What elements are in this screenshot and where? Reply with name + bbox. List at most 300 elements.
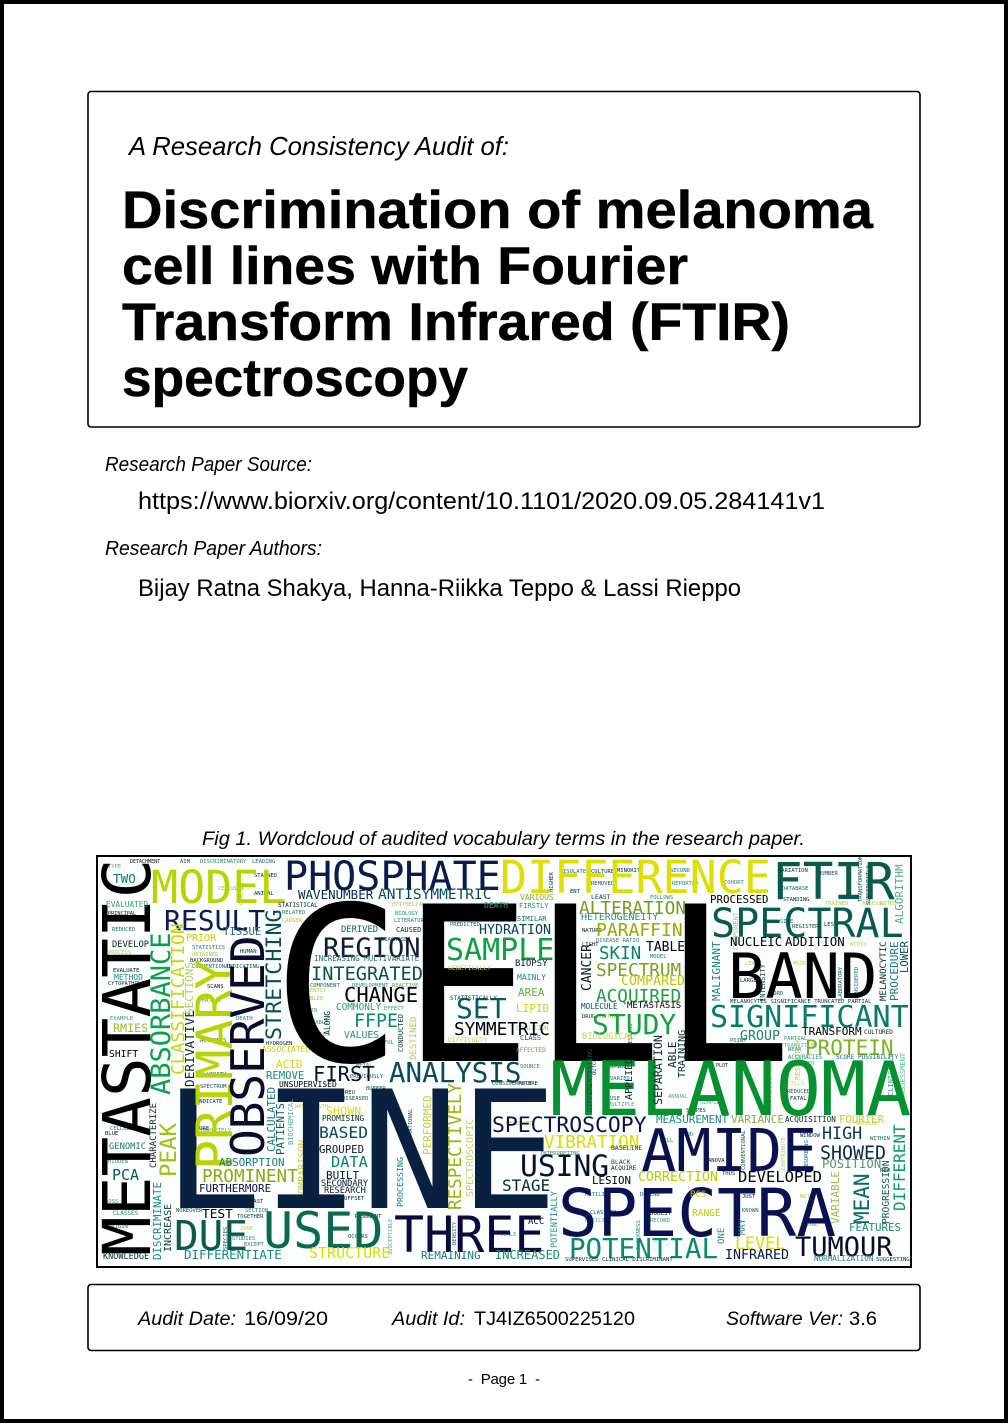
tiny filler words: NEAR bbox=[788, 1047, 802, 1053]
largest words: DUE bbox=[174, 1212, 248, 1260]
tiny filler words: DIAGNOSES bbox=[381, 937, 411, 943]
paper source: Research Paper Source: bbox=[105, 454, 312, 476]
tiny filler words: LABORATORY bbox=[838, 966, 844, 1000]
largest words: LINE bbox=[163, 1056, 558, 1247]
main title bbox=[122, 181, 874, 408]
tiny filler words: COMPONENT bbox=[732, 911, 740, 950]
small words: BIOPSY bbox=[515, 959, 548, 969]
small words: SHIFT bbox=[109, 1049, 138, 1060]
small words: AFFECTED bbox=[516, 1047, 546, 1054]
small words: VARIATION bbox=[778, 868, 808, 874]
tiny filler words: WIDTH bbox=[850, 942, 867, 948]
small words: AREA bbox=[518, 986, 545, 999]
tiny filler words: ENT bbox=[570, 889, 581, 895]
tiny filler words: FOLLOWS bbox=[650, 895, 673, 901]
small words: CHARACTERIZE bbox=[149, 1103, 159, 1168]
audit details panel bbox=[88, 1284, 920, 1350]
small words: STATISTICAL bbox=[278, 902, 318, 909]
small words: REMOVE bbox=[266, 1070, 304, 1082]
tiny filler words: DISEASED bbox=[342, 1096, 368, 1102]
small words: VARIABLE bbox=[829, 1171, 842, 1224]
tiny filler words: RELATED bbox=[282, 910, 305, 916]
main title: cell lines with Fourier bbox=[122, 237, 688, 296]
small words: SCORE POSSIBILITY bbox=[836, 1054, 899, 1061]
small words: RESEARCH bbox=[324, 1186, 366, 1196]
medium words: STUDY bbox=[592, 1008, 676, 1041]
tiny filler words: SOURCE bbox=[520, 1064, 540, 1070]
small words: INCREASED bbox=[495, 1248, 560, 1262]
tiny filler words: SECTION bbox=[245, 1208, 268, 1214]
tiny filler words: HIGHER bbox=[549, 871, 555, 892]
largest words: THREE bbox=[394, 1206, 545, 1264]
small words: DISCRIMINATE bbox=[151, 1182, 164, 1260]
medium words: REGION bbox=[323, 933, 421, 964]
tiny filler words: KNOWN bbox=[742, 1208, 759, 1214]
tiny filler words: STATISTICS bbox=[192, 945, 225, 951]
main title: Discrimination of melanoma bbox=[122, 181, 874, 240]
tiny filler words: GOOD bbox=[680, 1132, 693, 1138]
small words: INTENSITY bbox=[759, 963, 767, 1002]
medium words: FIRST bbox=[313, 1062, 375, 1086]
medium words: PEAK bbox=[156, 1123, 182, 1177]
largest words: PRIMARY bbox=[186, 959, 244, 1170]
medium words: VIBRATION bbox=[544, 1133, 639, 1153]
tiny filler words: CELLS bbox=[788, 1081, 805, 1087]
small words: SUGGEST bbox=[646, 1210, 672, 1217]
small words: RANGE bbox=[692, 1208, 721, 1219]
tiny filler words: CYTOPATHOLOGY bbox=[108, 981, 152, 987]
tiny filler words: CONTRIBUTE bbox=[781, 1137, 787, 1170]
paper authors bbox=[105, 538, 741, 602]
tiny filler words: DIFFICULTY bbox=[448, 1036, 487, 1044]
small words: COMMONLY bbox=[336, 1002, 382, 1013]
tiny filler words: DISEASE RATIO bbox=[596, 938, 639, 944]
medium words: STAGE bbox=[502, 1176, 550, 1195]
tiny filler words: ZONE bbox=[240, 1226, 253, 1232]
medium words: POTENTIAL bbox=[569, 1233, 718, 1265]
paper authors: Research Paper Authors: bbox=[105, 538, 322, 560]
small words: NUCLEIC bbox=[730, 934, 782, 949]
tiny filler words: PROCESS bbox=[108, 950, 131, 956]
tiny filler words: TRANSITION bbox=[784, 1043, 817, 1049]
medium words: STRETCHING bbox=[262, 909, 287, 1040]
tiny filler words: CONSIDERABLE bbox=[492, 1081, 532, 1087]
tiny filler words: LOSS bbox=[105, 1199, 118, 1205]
small words: RMIES bbox=[113, 1021, 148, 1035]
tiny filler words: CULTURE bbox=[186, 1126, 209, 1132]
tiny filler words: REGISTER bbox=[792, 924, 819, 930]
audit date: 16/09/20 bbox=[244, 1308, 328, 1330]
tiny filler words: CAUSED bbox=[396, 926, 421, 934]
largest words: AMIDE bbox=[641, 1117, 817, 1185]
tiny filler words: NOTED bbox=[880, 901, 897, 907]
small words: SHOWN bbox=[326, 1104, 361, 1118]
tiny filler words: VARIED bbox=[610, 1076, 630, 1082]
small words: ALGORITHM bbox=[893, 864, 906, 924]
tiny filler words: PREDICTED bbox=[450, 922, 480, 928]
tiny filler words: LIGHT bbox=[582, 942, 599, 948]
main title: spectroscopy bbox=[122, 349, 469, 408]
tiny filler words: CONDUCTED bbox=[397, 1014, 405, 1052]
audit id: Audit Id: bbox=[391, 1308, 465, 1330]
tiny filler words: EVALUATION bbox=[205, 1196, 238, 1202]
small words: PROGRESSION bbox=[881, 1160, 892, 1224]
small words: MELANOCYTES SIGNIFICANCE TRUNCATED PARTIAL bbox=[730, 999, 872, 1005]
tiny filler words: LEAST bbox=[745, 961, 762, 967]
tiny filler words: GOAL bbox=[805, 1222, 819, 1228]
tiny filler words: DESTINED bbox=[409, 1017, 419, 1060]
tiny filler words: LITERATURE bbox=[394, 918, 427, 924]
audit date: Audit Date: bbox=[137, 1308, 236, 1330]
small words: DIFFERENTIATE bbox=[184, 1247, 282, 1262]
small words: DATABASE bbox=[782, 886, 808, 892]
tiny filler words: OBTAINED bbox=[192, 952, 218, 958]
main title: Transform Infrared (FTIR) bbox=[122, 293, 790, 352]
medium words: HIGH bbox=[822, 1123, 862, 1143]
tiny filler words: INDICATE bbox=[196, 1099, 222, 1105]
software version: 3.6 bbox=[849, 1308, 877, 1330]
tiny filler words: SCALE bbox=[500, 1232, 517, 1238]
small words: HYDRATION bbox=[479, 923, 551, 938]
tiny filler words: BUFFER bbox=[366, 1086, 387, 1092]
audit id bbox=[391, 1308, 635, 1330]
small words: GROUP bbox=[740, 1029, 780, 1044]
small words: TWO bbox=[113, 871, 136, 886]
tiny filler words: COMPLETELY bbox=[198, 1128, 232, 1134]
tiny filler words: SMELLOF bbox=[855, 1121, 878, 1127]
small words: BASELINE bbox=[611, 1144, 642, 1152]
tiny filler words: TISSUES bbox=[306, 1032, 329, 1038]
tiny filler words: ANIMAL bbox=[254, 891, 275, 897]
tiny filler words: MOTILITY bbox=[585, 1218, 612, 1224]
page number: - Page 1 - bbox=[468, 1371, 540, 1388]
medium words: DEVELOPED bbox=[738, 1168, 822, 1186]
small words: SUPERVISED CLINICAL DISCRIMINANT bbox=[565, 1257, 673, 1263]
largest words: FTIR bbox=[772, 853, 895, 912]
tiny filler words: SMALL bbox=[180, 1192, 197, 1198]
tiny filler words: ENABLED bbox=[300, 996, 323, 1002]
small words: GENETICALLY bbox=[448, 964, 491, 972]
tiny filler words: REACTIVE bbox=[392, 983, 418, 989]
tiny filler words: LESS bbox=[824, 922, 837, 928]
wordcloud bbox=[89, 851, 911, 1267]
figure caption: Fig 1. Wordcloud of audited vocabulary terms in the research paper. bbox=[202, 829, 805, 850]
paper source bbox=[105, 454, 825, 515]
tiny filler words: RECENTLY bbox=[300, 988, 327, 994]
tiny filler words: CLASSIFY bbox=[590, 1210, 617, 1216]
tiny filler words: MODE bbox=[793, 961, 806, 967]
tiny filler words: WILL bbox=[660, 1138, 674, 1144]
small words: DETACHMENT bbox=[130, 859, 160, 865]
small words: CANCER bbox=[580, 944, 595, 991]
tiny filler words: CONDITION bbox=[516, 1025, 549, 1032]
tiny filler words: METAL bbox=[356, 1063, 373, 1069]
tiny filler words: LIMITED bbox=[312, 1044, 335, 1050]
tiny filler words: WAVELENGTH bbox=[295, 1104, 328, 1110]
medium words: SPECTRUM bbox=[596, 961, 681, 981]
tiny filler words: DENSITY bbox=[452, 1221, 458, 1245]
medium words: ABSORBANCE bbox=[146, 932, 177, 1095]
small words: NORMALIZATION bbox=[814, 1254, 874, 1263]
tiny filler words: INTERPRETING bbox=[540, 1151, 580, 1157]
small words: FOURIER bbox=[839, 1113, 885, 1126]
tiny filler words: MEMBRANE bbox=[506, 1121, 532, 1127]
tiny filler words: HUMAN bbox=[240, 949, 257, 955]
small words: CALCULATED bbox=[265, 1087, 278, 1152]
tiny filler words: JUST bbox=[742, 1194, 756, 1200]
medium words: PROMINENT bbox=[202, 1167, 298, 1187]
small words: TRAINING bbox=[677, 1030, 688, 1078]
medium words: PROTEIN bbox=[805, 1036, 894, 1060]
tiny filler words: STAINED bbox=[254, 873, 277, 879]
tiny filler words: EXCEPT bbox=[244, 1242, 265, 1248]
tiny filler words: TRANSFORMATION bbox=[858, 856, 864, 902]
paper source: https://www.biorxiv.org/content/10.1101/2020.09.05.284141v1 bbox=[138, 488, 825, 515]
small words: BLACK bbox=[611, 1158, 631, 1166]
tiny filler words: AIM bbox=[180, 859, 191, 865]
largest words: CELL bbox=[272, 861, 792, 1112]
tiny filler words: REDUCED bbox=[787, 1089, 810, 1095]
small words: EVALUATED bbox=[106, 900, 149, 909]
small words: TISSUE bbox=[223, 926, 261, 938]
small words: POTENTIALLY bbox=[550, 1190, 560, 1248]
tiny filler words: USEFUL bbox=[374, 1040, 395, 1046]
small words: PROCESSED bbox=[710, 893, 769, 906]
tiny filler words: TYPE bbox=[108, 864, 121, 870]
tiny filler words: GIVEN bbox=[426, 1040, 443, 1046]
tiny filler words: HYDROGEN bbox=[266, 1041, 292, 1047]
title panel bbox=[88, 92, 920, 427]
tiny filler words: NATURE bbox=[582, 928, 602, 934]
tiny filler words: FATAL bbox=[790, 1096, 807, 1102]
paper authors: Bijay Ratna Shakya, Hanna-Riikka Teppo & Lassi Rieppo bbox=[138, 575, 741, 602]
small words: STANDING bbox=[783, 897, 810, 903]
tiny filler words: MATRIX bbox=[202, 998, 223, 1004]
small words: VARIANCE bbox=[731, 1113, 784, 1126]
small words: ABLE bbox=[666, 1042, 679, 1068]
small words: HETEROGENEITY bbox=[581, 912, 658, 923]
small words: WAVENUMBER bbox=[298, 887, 374, 902]
medium words: SYMMETRIC bbox=[454, 1020, 550, 1040]
largest words: SPECTRAL bbox=[711, 901, 904, 947]
small words: TABLE bbox=[646, 940, 685, 955]
tiny filler words bbox=[105, 856, 907, 1255]
tiny filler words: NEW bbox=[880, 1168, 891, 1174]
tiny filler words: DEATH bbox=[236, 1016, 253, 1022]
small words: MALIGNANT bbox=[710, 941, 723, 1001]
medium words: CLASSIFICATION bbox=[168, 923, 189, 1075]
small words: FURTHERMORE bbox=[199, 1182, 271, 1195]
tiny filler words: ANOVA bbox=[708, 1158, 725, 1164]
tiny filler words: EXAMPLE bbox=[110, 1016, 133, 1022]
tiny filler words: WITHIN bbox=[600, 1014, 620, 1020]
small words: PROMISING bbox=[322, 1114, 365, 1123]
small words: ACID bbox=[276, 1058, 302, 1071]
tiny filler words: THUS bbox=[722, 1171, 735, 1177]
tiny filler words: ATTENUATED bbox=[116, 956, 149, 962]
tiny filler words: POINT bbox=[730, 1038, 747, 1044]
small words: GROUPED bbox=[319, 1143, 364, 1156]
tiny filler words: EPITHELIAL bbox=[392, 902, 426, 908]
tiny filler words: CONVENTIONAL bbox=[741, 1130, 747, 1170]
small words: ACCURACIES bbox=[788, 1055, 823, 1061]
tiny filler words: TECHNIQUE bbox=[374, 1175, 380, 1205]
tiny filler words: RECORD bbox=[650, 1218, 670, 1224]
small words: BUILT bbox=[326, 1169, 359, 1182]
tiny filler words: WORD bbox=[770, 991, 783, 997]
largest words: SPECTRA bbox=[558, 1175, 836, 1252]
tiny filler words: COMPONENT bbox=[310, 983, 340, 989]
medium words: SKIN bbox=[599, 944, 641, 964]
tiny filler words: DEPEND bbox=[640, 1192, 660, 1198]
small words: SECONDARY bbox=[321, 1179, 369, 1189]
small words: PATIENTS bbox=[274, 1103, 287, 1155]
medium words: BASED bbox=[319, 1123, 368, 1142]
tiny filler words: FACTOR bbox=[510, 1196, 531, 1202]
medium words: FFPE bbox=[354, 1011, 398, 1032]
tiny filler words: FIRSTLY bbox=[519, 902, 549, 910]
tiny filler words: CONSIDERED bbox=[854, 967, 860, 1000]
tiny filler words: ALONG bbox=[323, 1011, 332, 1035]
small words: VARIOUS bbox=[520, 893, 554, 902]
small words: INCREASE bbox=[163, 1204, 174, 1252]
small words: MELANOCYTIC bbox=[879, 941, 889, 1001]
tiny filler words: FUTURE bbox=[518, 1081, 538, 1087]
tiny filler words: LAST bbox=[250, 1199, 264, 1205]
tiny filler words: NOTE bbox=[800, 1194, 813, 1200]
small words: METASTASIS bbox=[627, 1001, 681, 1011]
tiny filler words: TOGETHER bbox=[237, 1214, 264, 1220]
medium words: RESPECTIVELY bbox=[446, 1082, 466, 1210]
tiny filler words: FLUIDITY bbox=[200, 1072, 227, 1078]
tiny filler words: SECOND bbox=[670, 868, 690, 874]
tiny filler words: MULTIPLE bbox=[608, 1102, 634, 1108]
tiny filler words: CONVENTIONAL bbox=[192, 964, 232, 970]
tiny filler words: TRAINED bbox=[825, 901, 848, 907]
tiny filler words: REU bbox=[345, 1090, 355, 1096]
small words: DERIVATIVE bbox=[183, 1010, 198, 1087]
tiny filler words: STUDIES bbox=[232, 1236, 255, 1242]
medium words: PCA bbox=[112, 1166, 139, 1184]
small words: PROCEDURE bbox=[888, 941, 901, 1001]
tiny filler words: COHORT bbox=[724, 880, 745, 886]
largest words: OBSERVED bbox=[221, 935, 275, 1157]
medium words: SPECTROSCOPY bbox=[492, 1113, 647, 1138]
tiny filler words: MEAN bbox=[724, 1044, 737, 1050]
tiny filler words: LARGE bbox=[740, 978, 757, 984]
tiny filler words: CELLULAR bbox=[110, 1126, 137, 1132]
tiny filler words: SPECTRUM bbox=[200, 1084, 227, 1090]
small words: MAY bbox=[738, 1218, 748, 1235]
tiny filler words: CULTURE bbox=[591, 869, 614, 875]
tiny filler words: THICKNESS bbox=[636, 1220, 642, 1250]
tiny filler words: SELECTED bbox=[788, 1061, 814, 1067]
tiny filler words: MAIN bbox=[304, 1008, 317, 1014]
small words: LESION bbox=[592, 1174, 631, 1187]
medium words bbox=[112, 898, 909, 1265]
small words: FEATURES bbox=[849, 1221, 901, 1234]
tiny filler words: PREVIOUSLY bbox=[350, 1074, 384, 1080]
largest words: USED bbox=[263, 1202, 383, 1260]
small words: PLOT bbox=[716, 1063, 728, 1069]
tiny filler words: ORIGIN bbox=[108, 1224, 128, 1230]
medium words: SET bbox=[456, 992, 507, 1025]
tiny filler words: EFFECT bbox=[384, 1006, 405, 1012]
largest words: MODEL bbox=[151, 861, 286, 914]
medium words: DIFFERENT bbox=[890, 1124, 909, 1211]
small words: REMAINING bbox=[421, 1249, 481, 1262]
small words: PROCESSING bbox=[395, 1157, 405, 1207]
tiny filler words: RELIABLE bbox=[302, 1020, 328, 1026]
medium words: ACQUIRED bbox=[596, 987, 681, 1007]
tiny filler words: USE bbox=[610, 1096, 620, 1102]
small words: CLASS bbox=[520, 1034, 541, 1042]
medium words: LEVEL bbox=[735, 1233, 785, 1253]
tiny filler words: DEVELOPMENT bbox=[352, 983, 389, 989]
tiny filler words: REPORTED bbox=[672, 881, 698, 887]
small words: CULTURED bbox=[864, 1029, 893, 1036]
tiny filler words: CAPABILITIES bbox=[766, 1059, 774, 1110]
tiny filler words: SIMILAR bbox=[517, 915, 547, 923]
tiny filler words: INDICATING bbox=[226, 964, 259, 970]
tiny filler words: VIBRATIONAL bbox=[408, 1108, 414, 1145]
small words bbox=[103, 859, 911, 1263]
small words: DERIVED bbox=[341, 925, 378, 935]
tiny filler words: SCANS bbox=[207, 984, 224, 990]
tiny filler words: PROGRESSING bbox=[628, 1024, 634, 1060]
tiny filler words: ACCOUNTS bbox=[200, 1038, 226, 1044]
largest words bbox=[89, 851, 911, 1264]
small words: OFFSET bbox=[344, 1196, 365, 1202]
tiny filler words: SHAPES bbox=[686, 1108, 706, 1114]
small words: SPECTROSCOPIC bbox=[465, 1119, 476, 1197]
small words: DEVELOP bbox=[112, 940, 149, 950]
largest words: MELANOMA bbox=[550, 1045, 911, 1133]
tiny filler words: ASSOCIATED bbox=[262, 1045, 310, 1054]
small words: KNOWLEDGE bbox=[103, 1252, 149, 1262]
small words: PERFORMED bbox=[421, 1095, 434, 1155]
medium words: PARAFFIN bbox=[596, 920, 683, 941]
tiny filler words: MOTILITY bbox=[585, 1192, 612, 1198]
small words: EVALUATE bbox=[113, 968, 140, 974]
medium words: MEAN bbox=[850, 1173, 874, 1224]
tiny filler words: MODEL bbox=[650, 954, 667, 960]
small words: TEST bbox=[202, 1207, 233, 1222]
tiny filler words: RESONANT bbox=[355, 1214, 382, 1220]
small words: SECTIONS bbox=[183, 962, 196, 1015]
tiny filler words: REDUCED bbox=[112, 927, 135, 933]
tiny filler words: SUBSEQUENTLY bbox=[866, 865, 872, 905]
audit date bbox=[137, 1308, 328, 1330]
medium words: ALTERATION bbox=[579, 898, 686, 919]
small words: ABSORPTION bbox=[219, 1156, 285, 1169]
tiny filler words: COMPARISON bbox=[297, 1140, 308, 1200]
small words: SEPARATION bbox=[651, 1035, 665, 1105]
tiny filler words: OUTCOMES bbox=[592, 1048, 598, 1075]
tiny filler words: REMOVED bbox=[591, 881, 614, 887]
tiny filler words: SIMPLE bbox=[700, 1100, 720, 1106]
tiny filler words: WINDOW bbox=[800, 1133, 821, 1139]
small words: DIFFERENTIATING bbox=[586, 1049, 594, 1112]
tiny filler words: HIDDEN bbox=[108, 1159, 128, 1165]
small words: COMPARED bbox=[621, 974, 685, 989]
medium words: CHANGE bbox=[344, 983, 418, 1007]
small words: METHOD bbox=[114, 973, 143, 982]
tiny filler words: BACKGROUND bbox=[190, 958, 223, 964]
small words: ACQUISITION bbox=[785, 1115, 836, 1124]
small words: PCS bbox=[690, 1190, 706, 1200]
small words: BLUE bbox=[105, 1131, 118, 1137]
